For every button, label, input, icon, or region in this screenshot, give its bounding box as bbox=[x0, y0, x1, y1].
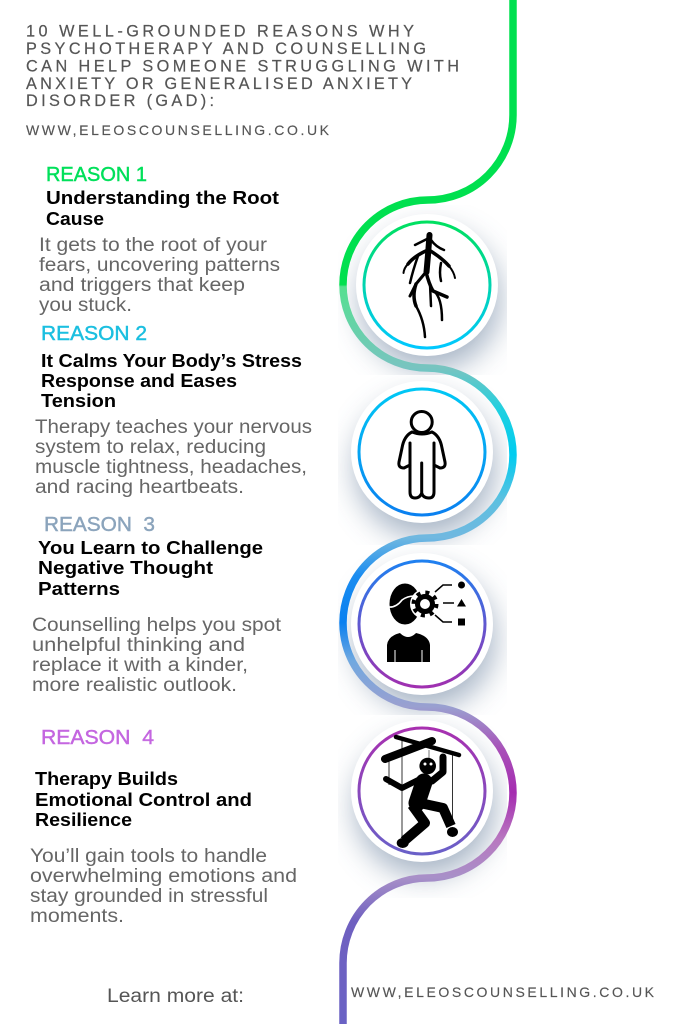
reason 1 body: you stuck. bbox=[39, 295, 132, 316]
reason 3 body: more realistic outlook. bbox=[32, 675, 237, 696]
icon: thinking head bbox=[387, 582, 466, 662]
reason 2 heading bbox=[41, 350, 302, 411]
reason 1 heading: Understanding the Root bbox=[46, 187, 279, 208]
reason 3 heading: Negative Thought bbox=[38, 557, 213, 578]
reason 4 heading: Resilience bbox=[35, 809, 132, 830]
reason 2 label: REASON 2 bbox=[41, 323, 147, 345]
reason 3 heading: Patterns bbox=[38, 578, 120, 599]
website url bottom: WWW,ELEOSCOUNSELLING.CO.UK bbox=[351, 984, 655, 1000]
heading: title: ANXIETY OR GENERALISED ANXIETY bbox=[26, 75, 412, 93]
panel: reason 3 bbox=[32, 514, 282, 696]
reason 2 body: system to relax, reducing bbox=[35, 437, 266, 458]
winding gradient timeline line bbox=[343, 0, 513, 1024]
reason 4 body bbox=[30, 846, 297, 927]
reason 2 body bbox=[35, 417, 312, 498]
panel: reason 2 bbox=[35, 323, 312, 498]
panel: reason 1 bbox=[39, 164, 280, 316]
heading: title bbox=[26, 22, 459, 110]
reason 2 body: Therapy teaches your nervous bbox=[35, 417, 312, 438]
reason 4 body: stay grounded in stressful bbox=[30, 886, 268, 907]
shadows behind circles bbox=[355, 230, 500, 876]
icon circle 2: person bbox=[351, 381, 493, 523]
reason 4 body: overwhelming emotions and bbox=[30, 866, 297, 887]
reason 4 body: moments. bbox=[30, 906, 124, 927]
reason 1 body: fears, uncovering patterns bbox=[39, 255, 280, 276]
icon circle 3: head with gear bbox=[351, 553, 493, 695]
footer call to action: Learn more at: bbox=[107, 986, 244, 1007]
reason 3 body bbox=[32, 615, 282, 696]
reason 2 body: muscle tightness, headaches, bbox=[35, 457, 307, 478]
reason 3 body: unhelpful thinking and bbox=[32, 635, 245, 656]
reason 2 body: and racing heartbeats. bbox=[35, 477, 244, 498]
reason 1 label: REASON 1 bbox=[46, 164, 147, 186]
icon circle 1: roots bbox=[356, 214, 498, 356]
reason 3 body: replace it with a kinder, bbox=[32, 655, 248, 676]
reason 1 body: and triggers that keep bbox=[39, 275, 245, 296]
icon: marionette bbox=[385, 737, 459, 848]
icon: roots bbox=[404, 235, 455, 337]
icon circle 4: puppet bbox=[351, 720, 493, 862]
reason 4 heading: Emotional Control and bbox=[35, 789, 252, 810]
panel: reason 4 bbox=[30, 727, 297, 927]
reason 4 label: REASON 4 bbox=[41, 727, 154, 749]
reason 2 heading: Response and Eases bbox=[41, 370, 237, 391]
reason 2 heading: It Calms Your Body’s Stress bbox=[41, 350, 302, 371]
reason 3 body: Counselling helps you spot bbox=[32, 615, 282, 636]
website url top: WWW,ELEOSCOUNSELLING.CO.UK bbox=[26, 122, 330, 138]
reason 4 heading: Therapy Builds bbox=[35, 768, 178, 789]
reason 4 body: You’ll gain tools to handle bbox=[30, 846, 267, 867]
reason 3 label: REASON 3 bbox=[44, 514, 155, 536]
icon: body outline bbox=[399, 412, 445, 498]
heading: title: CAN HELP SOMEONE STRUGGLING WITH bbox=[26, 58, 459, 76]
heading: title: 10 WELL-GROUNDED REASONS WHY bbox=[26, 22, 414, 40]
reason 3 heading bbox=[38, 537, 263, 599]
reason 1 body bbox=[39, 235, 280, 316]
reason 4 heading bbox=[35, 768, 252, 830]
reason 1 body: It gets to the root of your bbox=[39, 235, 268, 256]
reason 1 heading bbox=[46, 187, 279, 229]
heading: title: DISORDER (GAD): bbox=[26, 92, 214, 110]
reason 2 heading: Tension bbox=[41, 390, 116, 411]
reason 3 heading: You Learn to Challenge bbox=[38, 537, 263, 558]
reason 1 heading: Cause bbox=[46, 208, 104, 229]
heading: title: PSYCHOTHERAPY AND COUNSELLING bbox=[26, 40, 426, 58]
